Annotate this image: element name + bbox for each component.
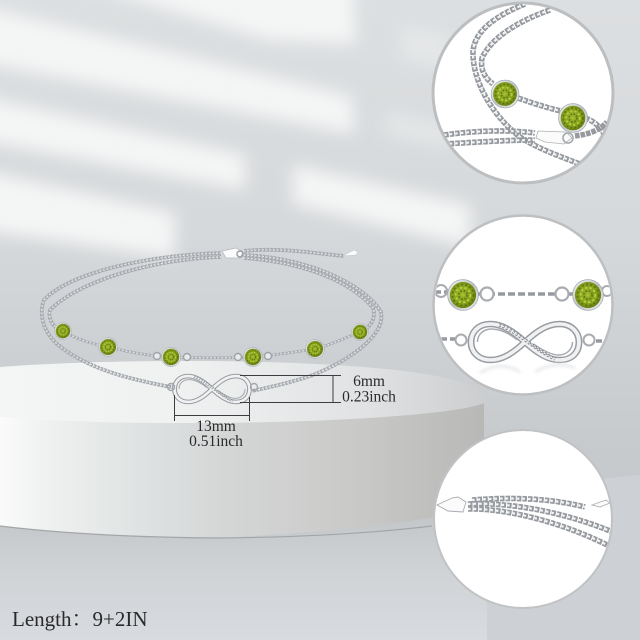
length text: Length：9+2IN [12,607,148,631]
detail circle: clasp and extender [434,430,615,608]
dimension: height [240,373,396,406]
clasp [222,248,243,258]
gemstones [491,80,587,132]
detail circle: clasp and stones [433,3,613,183]
extender tag [343,250,358,256]
label: 0.23inch: 0.23inch [342,388,396,406]
label: 0.51inch: 0.51inch [189,433,243,450]
gemstones [55,323,368,367]
label: 13mm: 13mm [196,418,236,435]
infinity charm [168,376,258,402]
dimension: width [174,395,250,450]
main bracelet [42,248,381,402]
chain: two outer strands [42,250,381,391]
chain: gemstone strand [66,332,360,360]
floor [0,515,487,640]
right floor band [487,475,640,640]
detail circle: stones and infinity [434,216,615,394]
label: 6mm: 6mm [353,373,385,390]
infinity charm [471,324,579,360]
podium cylinder [0,361,487,538]
gemstones [448,280,603,310]
